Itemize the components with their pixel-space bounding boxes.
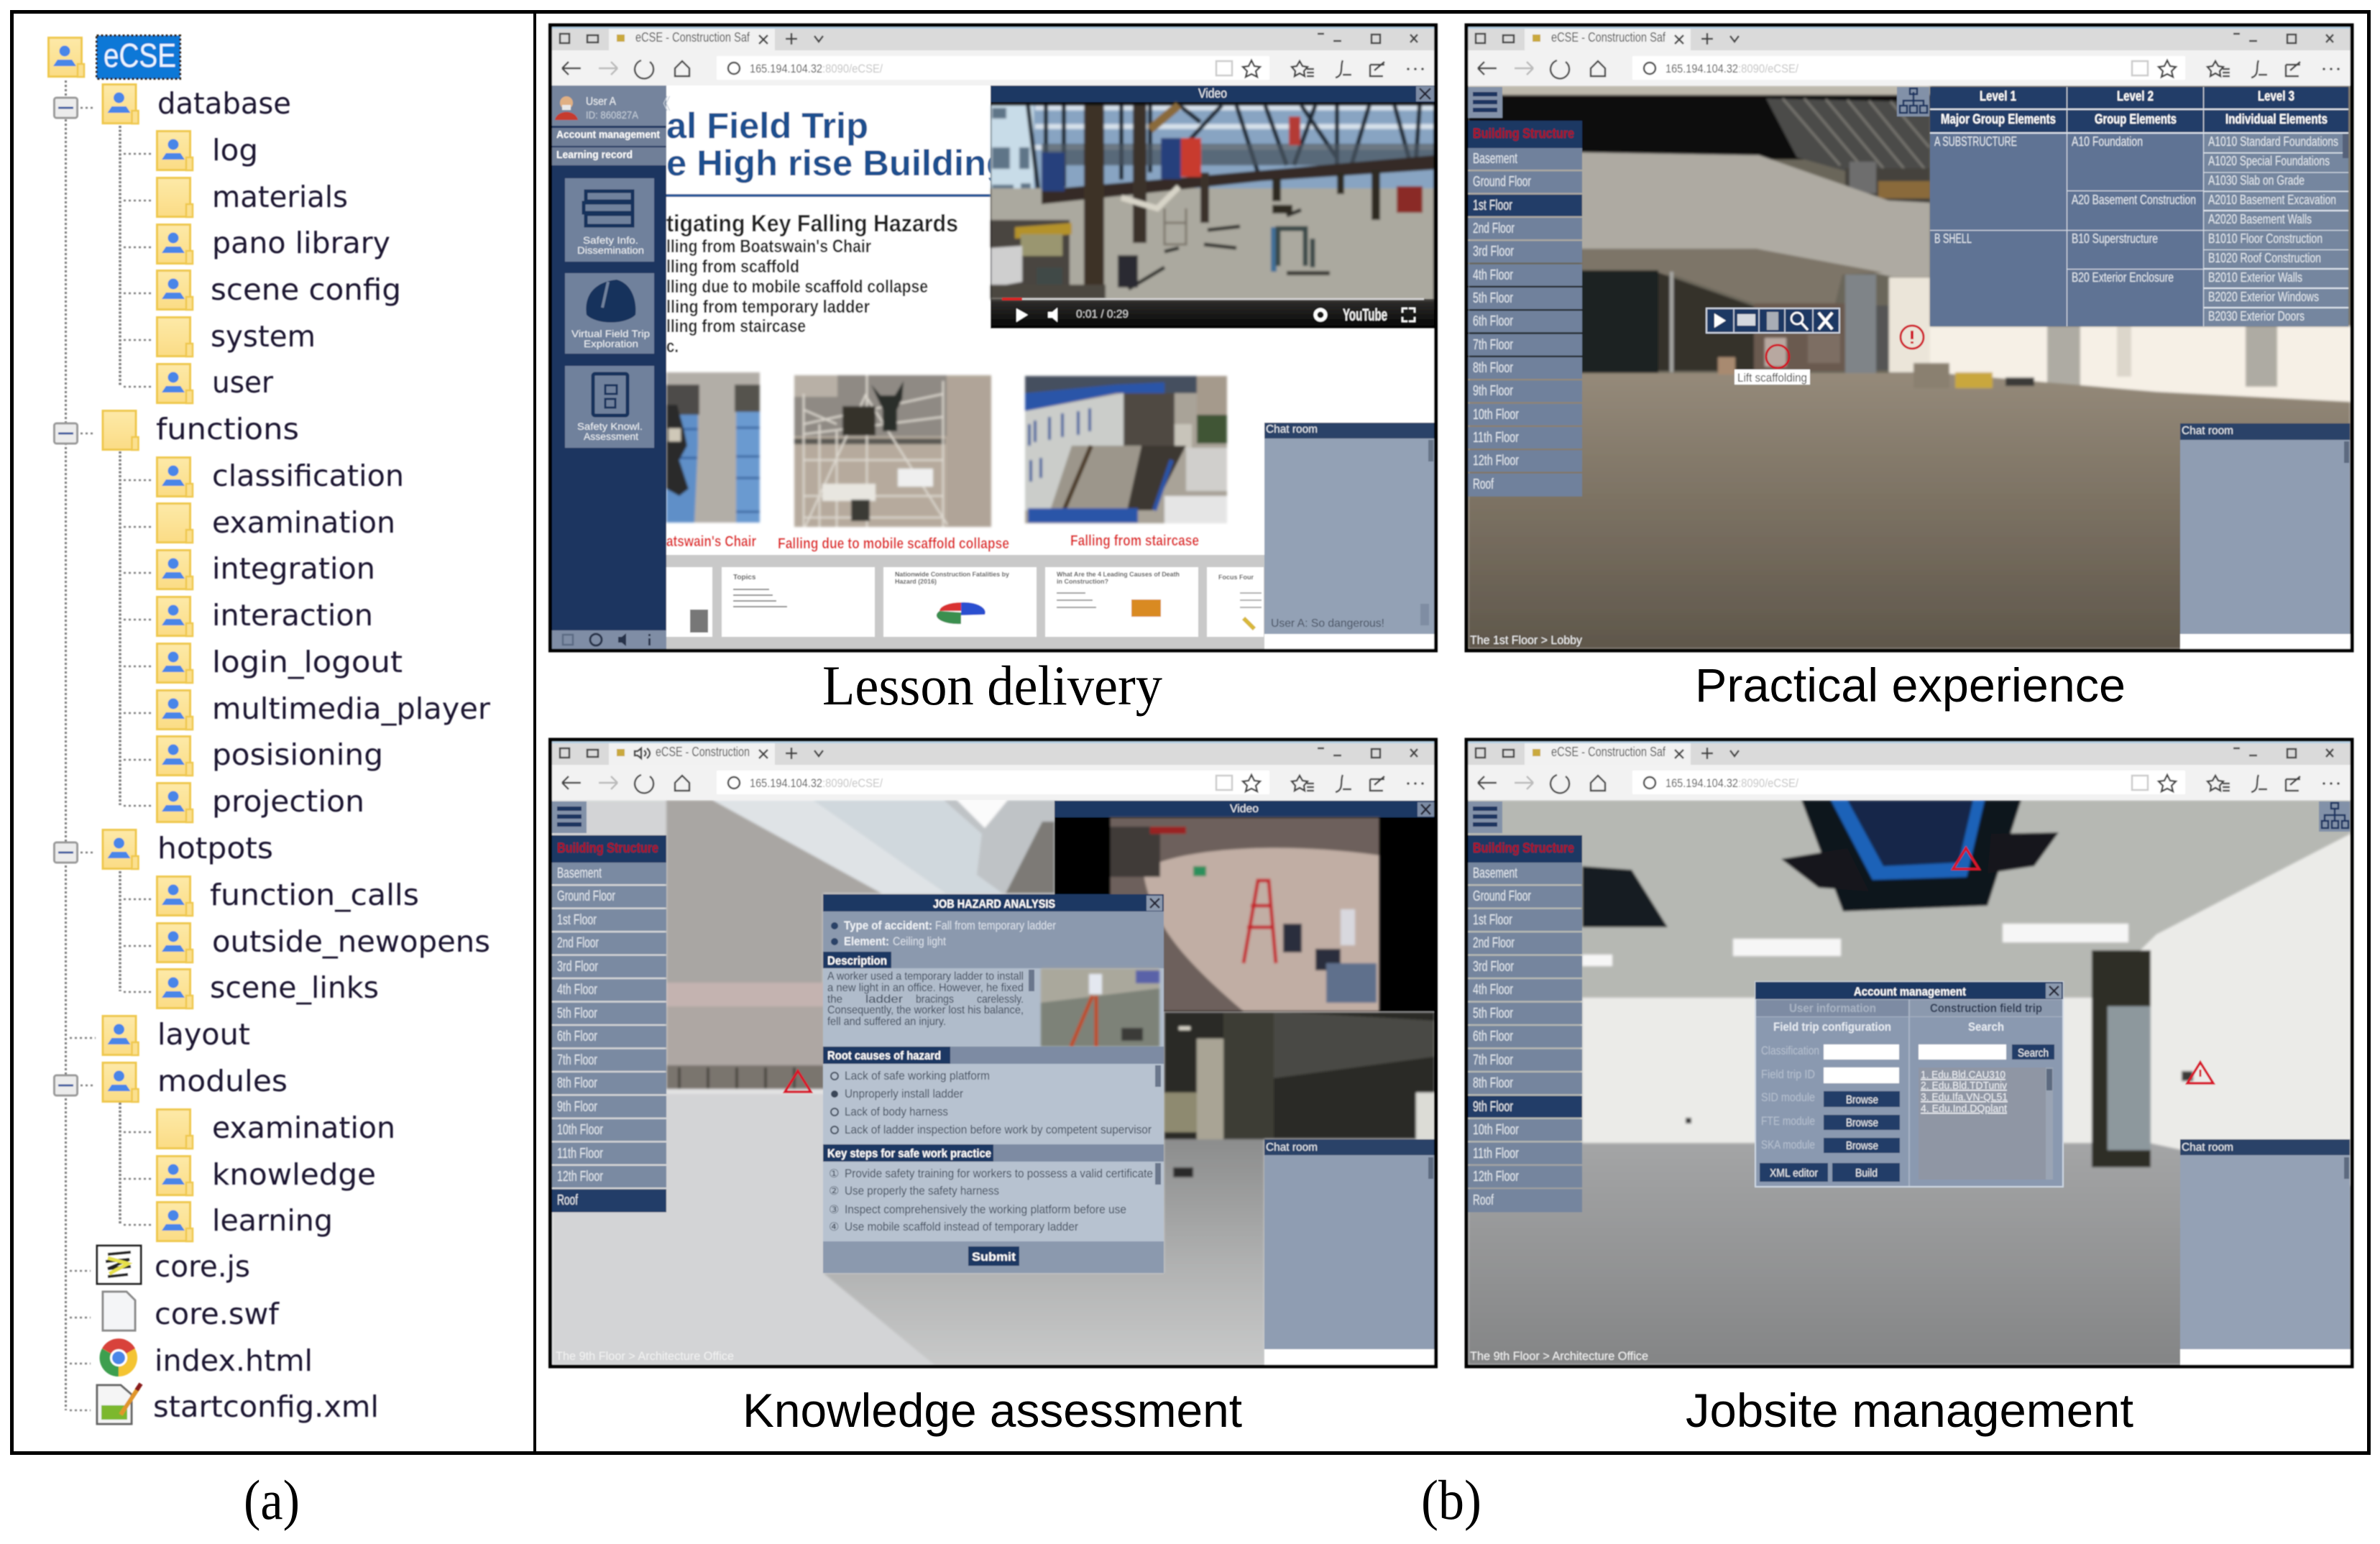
submit button xyxy=(968,1246,1019,1266)
slide title: al Field Trip xyxy=(666,106,868,146)
search column: 4. Edu.Ind.DQplant xyxy=(1921,1103,2008,1115)
building structure floor list: 5th Floor xyxy=(557,1006,597,1021)
description section: fell and suffered an injury. xyxy=(827,1016,946,1028)
account management dialog: Account management xyxy=(1854,985,1966,998)
building element table: Individual Elements xyxy=(2225,112,2328,127)
left sidebar: ID: 860827A xyxy=(586,109,638,121)
chat room: Chat room xyxy=(2182,425,2233,437)
building structure floor list: Building Structure xyxy=(1473,127,1574,142)
tree labels: examination xyxy=(212,1111,395,1145)
caption: Practical experience: Practical experience xyxy=(1695,658,2126,712)
search column: Search xyxy=(1968,1020,2004,1034)
browser chrome: eCSE - Construction xyxy=(656,745,750,759)
location label: The 1st Floor > Lobby xyxy=(1470,633,1582,647)
tree labels: posisioning xyxy=(212,737,383,772)
building structure floor list: 11th Floor xyxy=(1473,1146,1519,1162)
building structure floor list: 3rd Floor xyxy=(1473,959,1514,975)
building structure floor list: 4th Floor xyxy=(1473,982,1513,998)
browser chrome: :8090/eCSE/ xyxy=(822,776,883,790)
slide title: e High rise Building xyxy=(666,143,1008,183)
tree labels: modules xyxy=(157,1064,288,1098)
browser chrome: eCSE - Construction Saf xyxy=(1551,30,1666,45)
field trip configuration column: Field trip configuration xyxy=(1773,1020,1891,1034)
field trip configuration column: XML editor xyxy=(1770,1167,1819,1180)
building structure floor list: 5th Floor xyxy=(1473,1006,1513,1021)
video player xyxy=(991,86,1434,328)
building element table: B SHELL xyxy=(1934,231,1972,246)
left sidebar: Learning record xyxy=(556,149,633,161)
tree labels: function_calls xyxy=(210,878,419,912)
job hazard analysis dialog: JOB HAZARD ANALYSIS xyxy=(933,897,1055,911)
tree labels: index.html xyxy=(155,1343,313,1378)
description section: Consequently, the worker lost his balance, xyxy=(827,1004,1024,1016)
tree labels: classification xyxy=(212,459,404,493)
video player: Video xyxy=(1198,86,1227,101)
field trip configuration column: SKA module xyxy=(1761,1138,1815,1152)
building structure floor list xyxy=(1468,835,1582,1212)
building structure floor list: Building Structure xyxy=(1473,841,1574,856)
search column xyxy=(1910,1017,2062,1186)
icon: hierarchy button xyxy=(1897,87,1929,116)
tabs: User information xyxy=(1789,1001,1876,1015)
building element table: B1010 Floor Construction xyxy=(2208,231,2322,246)
slide thumbnail strip: What Are the 4 Leading Causes of Death xyxy=(1057,571,1180,578)
root causes section: Lack of ladder inspection before work by competent supervisor xyxy=(845,1123,1152,1136)
building structure floor list: 6th Floor xyxy=(1473,1029,1513,1044)
tree labels xyxy=(153,86,490,1424)
tabs xyxy=(1756,1000,2062,1016)
root causes section: Lack of body harness xyxy=(845,1105,948,1118)
building structure floor list: 3rd Floor xyxy=(557,959,598,975)
building element table: Major Group Elements xyxy=(1941,112,2056,127)
building element table: B10 Superstructure xyxy=(2072,231,2158,246)
screenshot: jobsite management xyxy=(1466,740,2352,1366)
slide thumbnail strip: Focus Four xyxy=(1218,574,1254,581)
tree labels: scene config xyxy=(211,272,401,307)
button: safety info dissemination xyxy=(565,178,654,262)
tree labels: user xyxy=(212,365,273,400)
root label eCSE: eCSE xyxy=(104,37,176,74)
chat room xyxy=(1264,423,1435,650)
building structure floor list: 11th Floor xyxy=(557,1146,603,1162)
panorama scene xyxy=(552,800,1435,1365)
tree labels: integration xyxy=(212,551,375,586)
photo: staircase xyxy=(1025,376,1227,523)
button: safety knowledge assessment: Assessment xyxy=(584,431,638,442)
label (a): (a) xyxy=(244,1469,300,1531)
left sidebar: 《 xyxy=(655,95,671,113)
key steps section xyxy=(823,1144,1164,1241)
description section: a new light in an office. However, he fixed xyxy=(827,982,1024,994)
label (b): (b) xyxy=(1421,1469,1481,1531)
building element table: B20 Exterior Enclosure xyxy=(2072,270,2174,285)
building structure floor list: 6th Floor xyxy=(557,1029,597,1044)
hazard markers xyxy=(1953,848,2213,1083)
tree labels: multimedia_player xyxy=(212,691,490,726)
tree labels: login_logout xyxy=(212,645,403,679)
building element table: Level 2 xyxy=(2117,89,2154,104)
building element table: B2020 Exterior Windows xyxy=(2208,290,2319,304)
building structure floor list: Basement xyxy=(557,865,602,881)
building structure floor list: Roof xyxy=(1473,477,1494,492)
tree labels: outside_newopens xyxy=(212,924,490,959)
slide bullet list: lling from staircase xyxy=(666,316,806,336)
job hazard analysis dialog xyxy=(823,894,1164,1273)
chat room: User A: So dangerous! xyxy=(1271,617,1384,630)
building structure floor list: Ground Floor xyxy=(1473,174,1531,190)
location label: The 9th Floor > Architecture Office xyxy=(556,1349,734,1363)
expand boxes xyxy=(55,98,78,1095)
description section xyxy=(823,952,1164,1047)
building element table: B2030 Exterior Doors xyxy=(2208,309,2305,323)
browser chrome: 165.194.104.32 xyxy=(750,776,822,790)
button: safety knowledge assessment: Safety Knowl. xyxy=(577,421,643,432)
tree labels: examination xyxy=(212,505,395,540)
search column: 2. Edu.Bld.TDTuniv xyxy=(1921,1080,2007,1092)
panorama scene xyxy=(1468,86,2351,649)
photo: mobile scaffold xyxy=(794,375,991,527)
building structure floor list: 3rd Floor xyxy=(1473,244,1514,259)
menu button xyxy=(1468,87,1502,118)
building structure floor list: 10th Floor xyxy=(1473,407,1519,423)
icon: core.swf blank file xyxy=(103,1292,135,1331)
building structure floor list: 7th Floor xyxy=(557,1052,597,1068)
slide bullet list xyxy=(666,210,958,357)
button: safety info dissemination: Dissemination xyxy=(577,244,644,256)
photo: worker on ladder xyxy=(1041,968,1159,1047)
tree labels: functions xyxy=(156,412,299,446)
slide thumbnail strip: Nationwide Construction Fatalities by xyxy=(895,571,1009,578)
button: safety knowledge assessment xyxy=(565,366,654,448)
job hazard analysis dialog: Fall from temporary ladder xyxy=(935,919,1056,932)
account management dialog xyxy=(1755,982,2063,1187)
tree connector lines xyxy=(66,81,151,1410)
building element table: A SUBSTRUCTURE xyxy=(1934,134,2017,149)
submit button: Submit xyxy=(972,1250,1016,1264)
field trip configuration column: Classification xyxy=(1761,1044,1819,1057)
building structure floor list: 9th Floor xyxy=(1473,383,1513,399)
chat room: Chat room xyxy=(2182,1141,2233,1154)
video player: 0:01 / 0:29 xyxy=(1076,308,1129,321)
building element table: A2020 Basement Walls xyxy=(2208,212,2312,226)
building element table: A2010 Basement Excavation xyxy=(2208,193,2336,207)
browser chrome: :8090/eCSE/ xyxy=(822,62,883,75)
building structure floor list: 2nd Floor xyxy=(557,935,599,951)
video panel xyxy=(1055,801,1435,1011)
building structure floor list: 10th Floor xyxy=(1473,1122,1519,1138)
building structure floor list: 4th Floor xyxy=(1473,267,1513,283)
hotspot toolbar xyxy=(1706,308,1839,333)
browser chrome: :8090/eCSE/ xyxy=(1738,776,1798,790)
building element table: A20 Basement Construction xyxy=(2072,193,2196,207)
root causes section: Unproperly install ladder xyxy=(845,1087,963,1100)
building structure floor list: Ground Floor xyxy=(1473,888,1531,904)
building structure floor list: Roof xyxy=(1473,1193,1494,1208)
tree labels: interaction xyxy=(212,598,373,633)
browser chrome xyxy=(1468,741,2351,800)
building structure floor list: 12th Floor xyxy=(1473,1169,1519,1185)
video panel: Video xyxy=(1230,803,1259,815)
building element table xyxy=(1930,87,2348,326)
photo captions: Falling from staircase xyxy=(1070,533,1199,549)
search column: Search xyxy=(2018,1047,2049,1060)
building element table: A1030 Slab on Grade xyxy=(2208,173,2305,188)
left sidebar xyxy=(552,86,671,650)
building element table: Level 3 xyxy=(2258,89,2294,104)
button: virtual field trip exploration: Virtual Field Trip xyxy=(571,328,650,339)
building structure floor list: 11th Floor xyxy=(1473,430,1519,446)
building structure floor list: 8th Floor xyxy=(1473,1075,1513,1091)
tabs: Construction field trip xyxy=(1930,1001,2042,1015)
building structure floor list: 9th Floor xyxy=(1473,1099,1513,1115)
building structure floor list: 8th Floor xyxy=(557,1075,597,1091)
browser chrome: 165.194.104.32 xyxy=(1665,62,1738,75)
building structure floor list: 12th Floor xyxy=(557,1169,603,1185)
browser chrome: eCSE - Construction Saf xyxy=(1551,745,1666,759)
building structure floor list: 7th Floor xyxy=(1473,337,1513,353)
tree labels: learning xyxy=(212,1203,333,1238)
video frame photo xyxy=(1110,817,1379,1011)
building structure floor list: 1st Floor xyxy=(557,912,597,928)
icon: hierarchy button xyxy=(2319,801,2350,832)
location label: The 9th Floor > Architecture Office xyxy=(1470,1349,1648,1363)
field trip configuration column: Browse xyxy=(1846,1140,1878,1152)
button: virtual field trip exploration xyxy=(565,273,654,354)
button: virtual field trip exploration: Exploration xyxy=(584,338,638,349)
browser chrome: 165.194.104.32 xyxy=(750,62,822,75)
description section: ladder xyxy=(865,993,904,1006)
tree labels: startconfig.xml xyxy=(153,1389,379,1424)
tree labels: pano library xyxy=(212,226,390,260)
browser chrome: eCSE - Construction Saf xyxy=(635,30,750,45)
building structure floor list: 2nd Floor xyxy=(1473,221,1515,236)
building structure floor list: 1st Floor xyxy=(1473,198,1512,213)
chat room: Chat room xyxy=(1266,423,1318,436)
building element table: Group Elements xyxy=(2095,112,2177,127)
slide thumbnail strip: Hazard (2016) xyxy=(895,578,937,585)
tree labels: system xyxy=(211,319,316,354)
field trip configuration column: Field trip ID xyxy=(1761,1067,1815,1081)
building element table: B1020 Roof Construction xyxy=(2208,251,2321,265)
field trip configuration column: Browse xyxy=(1846,1094,1878,1106)
browser chrome xyxy=(552,741,1435,800)
building structure floor list: Roof xyxy=(557,1193,578,1208)
key steps section: Key steps for safe work practice xyxy=(827,1146,991,1160)
key steps section: ④ xyxy=(829,1220,839,1233)
key steps section: Inspect comprehensively the working platform before use xyxy=(845,1203,1126,1216)
description section: Description xyxy=(827,954,887,968)
building structure floor list: 12th Floor xyxy=(1473,453,1519,469)
tree labels: core.js xyxy=(155,1249,250,1284)
building structure floor list xyxy=(552,835,666,1212)
key steps section: ③ xyxy=(829,1203,839,1216)
browser chrome: :8090/eCSE/ xyxy=(1738,62,1798,75)
tree labels: layout xyxy=(157,1017,250,1052)
key steps section: Provide safety training for workers to possess a valid certificate xyxy=(845,1167,1153,1180)
sidebar bottom toolbar xyxy=(552,630,666,650)
screenshot: knowledge assessment xyxy=(551,740,1436,1366)
browser chrome: 165.194.104.32 xyxy=(1665,776,1738,790)
hazard marker xyxy=(785,1071,811,1092)
slide thumbnail strip: Topics xyxy=(733,574,756,582)
building structure floor list: 9th Floor xyxy=(557,1099,597,1115)
photo: boatswain's chair xyxy=(666,372,760,523)
slide bullet list: c. xyxy=(666,336,679,357)
building element table: B2010 Exterior Walls xyxy=(2208,270,2302,285)
photo captions: Falling due to mobile scaffold collapse xyxy=(778,536,1009,552)
root causes section: Root causes of hazard xyxy=(827,1049,941,1062)
browser chrome xyxy=(1468,27,2351,86)
screenshot: practical experience xyxy=(1466,25,2352,651)
tree labels: core.swf xyxy=(155,1297,280,1331)
slide bullet list: lling from scaffold xyxy=(666,257,799,277)
icon: core.js script file xyxy=(97,1246,141,1284)
icon: index.html chrome logo xyxy=(100,1338,137,1377)
panel divider xyxy=(533,12,536,1453)
building element table: A1010 Standard Foundations xyxy=(2208,134,2338,149)
icon: startconfig.xml file xyxy=(97,1384,141,1424)
building structure floor list: 2nd Floor xyxy=(1473,935,1515,951)
chat room xyxy=(1264,1139,1435,1365)
button: safety info dissemination: Safety Info. xyxy=(583,234,638,246)
root causes section xyxy=(823,1047,1164,1144)
tree labels: materials xyxy=(212,180,348,214)
panorama scene xyxy=(1468,800,2351,1365)
tree labels: database xyxy=(157,86,291,121)
caption: Lesson delivery: Lesson delivery xyxy=(822,654,1162,717)
slide bullet list: lling due to mobile scaffold collapse xyxy=(666,277,928,297)
search column: 1. Edu.Bld.CAU310 xyxy=(1921,1069,2005,1081)
building structure floor list: 4th Floor xyxy=(557,982,597,998)
caption: Jobsite management: Jobsite management xyxy=(1686,1384,2133,1437)
building structure floor list: 8th Floor xyxy=(1473,360,1513,376)
tree labels: log xyxy=(212,133,258,167)
video player: YouTube xyxy=(1343,305,1387,325)
menu button xyxy=(1468,801,1502,833)
key steps section: ① xyxy=(829,1167,839,1180)
slide bullet list: lling from Boatswain's Chair xyxy=(666,236,871,257)
building structure floor list: Building Structure xyxy=(557,841,658,856)
key steps section: Use mobile scaffold instead of temporary ladder xyxy=(845,1220,1078,1233)
field trip configuration column: Browse xyxy=(1846,1117,1878,1129)
description section: A worker used a temporary ladder to install xyxy=(827,970,1024,983)
icon: root folder xyxy=(49,37,84,77)
caption: Knowledge assessment: Knowledge assessment xyxy=(743,1384,1242,1437)
building element table: A10 Foundation xyxy=(2072,134,2143,149)
building structure floor list: Basement xyxy=(1473,865,1517,881)
job hazard analysis dialog: Element: xyxy=(844,934,889,948)
key steps section: Use properly the safety harness xyxy=(845,1184,999,1198)
panel a: folder tree xyxy=(49,36,490,1424)
description section: carelessly. xyxy=(977,993,1024,1006)
video frame photo xyxy=(991,105,1434,300)
chat room xyxy=(2180,423,2351,649)
browser chrome xyxy=(552,27,1435,86)
field trip configuration column: FTE module xyxy=(1761,1114,1815,1128)
description section: the xyxy=(827,993,842,1006)
building structure floor list: 5th Floor xyxy=(1473,290,1513,306)
building structure floor list: 1st Floor xyxy=(1473,912,1512,928)
building structure floor list: 7th Floor xyxy=(1473,1052,1513,1068)
building structure floor list: 10th Floor xyxy=(557,1122,603,1138)
building structure floor list xyxy=(1468,121,1582,497)
tree labels: scene_links xyxy=(210,970,379,1005)
slide bullet list: tigating Key Falling Hazards xyxy=(666,210,958,236)
tree labels: hotpots xyxy=(157,831,273,865)
menu button xyxy=(552,801,587,833)
left sidebar: Account management xyxy=(556,129,660,141)
field trip configuration column: SID module xyxy=(1761,1090,1815,1104)
building structure floor list: Ground Floor xyxy=(557,888,615,904)
folder icons xyxy=(103,85,193,1241)
building element table: Level 1 xyxy=(1980,89,2016,104)
building structure floor list: 6th Floor xyxy=(1473,313,1513,329)
field trip configuration column: Build xyxy=(1855,1167,1878,1180)
hazard markers xyxy=(1766,326,1924,368)
description section: bracings xyxy=(916,993,954,1006)
screenshot: lesson delivery xyxy=(551,25,1436,651)
tree labels: projection xyxy=(212,784,364,819)
building structure floor list: Basement xyxy=(1473,151,1517,167)
slide thumbnail strip: in Construction? xyxy=(1057,578,1108,585)
slide bullet list: lling from temporary ladder xyxy=(666,297,870,317)
slide thumbnail strip xyxy=(666,555,1265,650)
slide background xyxy=(666,86,1435,650)
tooltip: lift scaffolding: Lift scaffolding xyxy=(1737,371,1807,385)
job hazard analysis dialog: Type of accident: xyxy=(844,919,932,932)
building element table: A1020 Special Foundations xyxy=(2208,154,2330,168)
root causes section: Lack of safe working platform xyxy=(845,1069,990,1083)
job hazard analysis dialog: Ceiling light xyxy=(893,934,946,948)
chat room xyxy=(2180,1139,2351,1365)
chat room: Chat room xyxy=(1266,1141,1318,1154)
photo captions: atswain's Chair xyxy=(666,533,756,550)
key steps section: ② xyxy=(829,1184,839,1198)
search column: 3. Edu.Ifa.VN-QL51 xyxy=(1921,1091,2008,1103)
field trip configuration column xyxy=(1756,1017,1908,1186)
photo captions xyxy=(666,533,1199,552)
left sidebar: User A xyxy=(586,96,616,108)
slide title xyxy=(666,106,1008,183)
tree labels: knowledge xyxy=(212,1157,376,1192)
